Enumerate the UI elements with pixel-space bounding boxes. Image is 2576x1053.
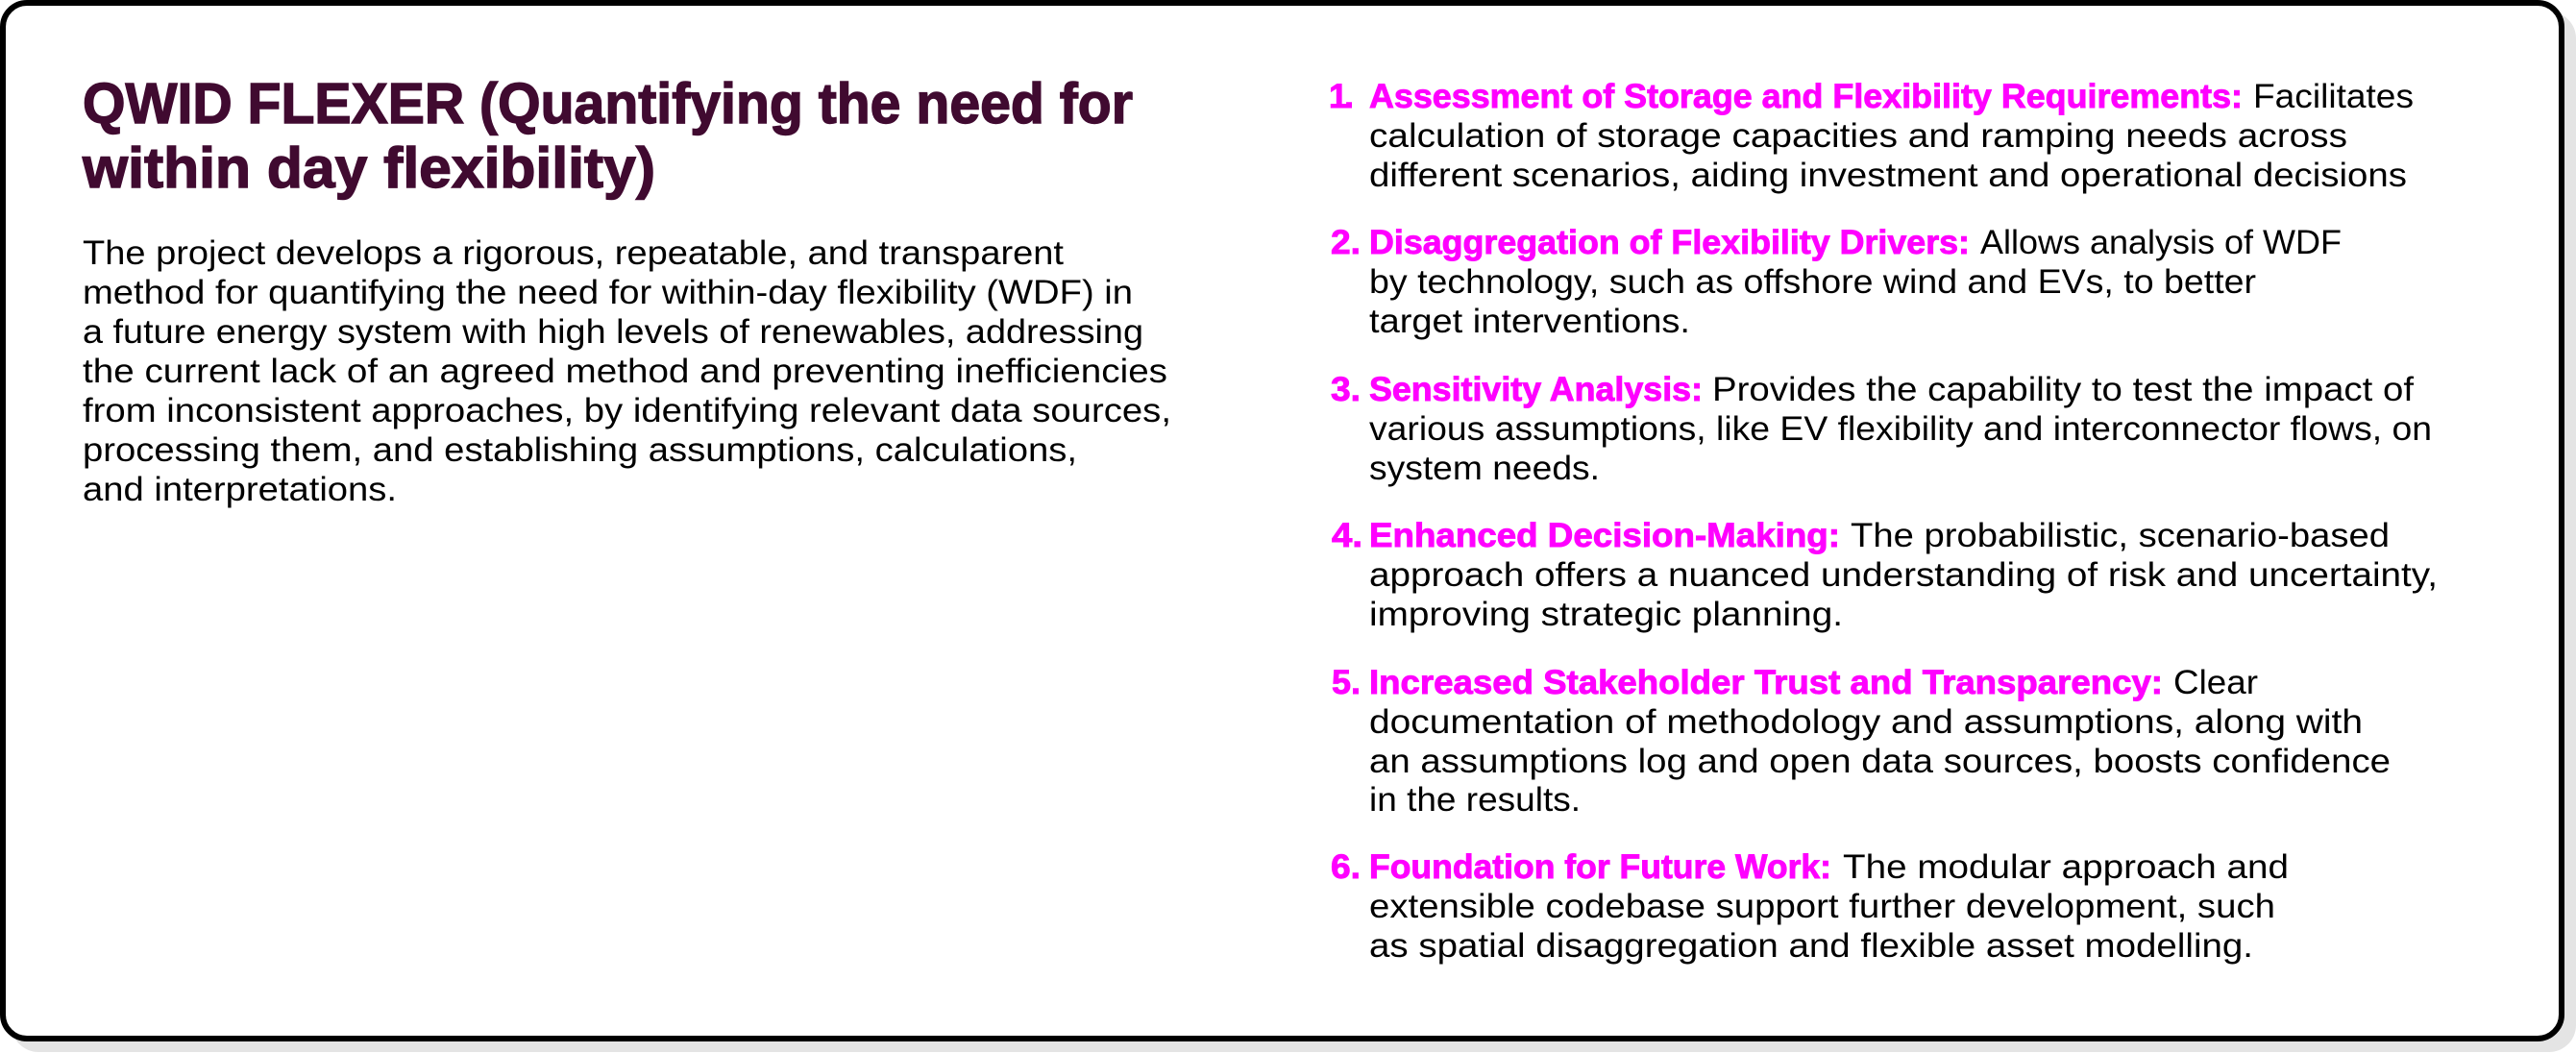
list item 5: stakeholder trust [1332,663,2391,819]
list item 2: flexibility drivers: 2. [1331,223,1361,261]
list item 4: decision-making: Enhanced Decision-Making: [1369,516,1840,554]
list item 6: future work: as spatial disaggregation and flexible asset modelling. [1369,926,2253,965]
list item 3: sensitivity analysis [1331,370,2432,487]
list item 1: storage and flexibility requirements: different scenarios, aiding investment and operational decisions [1369,156,2407,194]
text block: project description: the current lack of an agreed method and preventing inefficiencies [83,352,1167,390]
list item 3: sensitivity analysis: Provides the capability to test the impact of [1712,370,2414,408]
list item 1: storage and flexibility requirements [1329,77,2414,194]
list item 5: stakeholder trust: 5. [1332,663,1361,701]
list item 4: decision-making: improving strategic planning. [1369,595,1843,633]
list item 5: stakeholder trust: in the results. [1369,780,1581,819]
list item 2: flexibility drivers: Disaggregation of Flexibility Drivers: [1369,223,1970,261]
list item 3: sensitivity analysis: various assumptions, like EV flexibility and interconnector flows, on [1369,409,2432,448]
list item 5: stakeholder trust: an assumptions log and open data sources, boosts confidence [1369,742,2391,780]
list item 2: flexibility drivers: by technology, such as offshore wind and EVs, to better [1369,262,2256,301]
list item 6: future work: extensible codebase support further development, such [1369,887,2275,925]
list item 5: stakeholder trust: Clear [2173,663,2258,701]
list item 2: flexibility drivers: Allows analysis of WDF [1980,223,2342,261]
text block: project description: from inconsistent approaches, by identifying relevant data sources, [83,391,1171,429]
list item 4: decision-making [1332,516,2438,633]
title [82,72,1133,200]
list item 5: stakeholder trust: documentation of methodology and assumptions, along with [1369,702,2363,741]
text block: project description: The project develops a rigorous, repeatable, and transparent [83,233,1064,272]
text block: project description: a future energy system with high levels of renewables, addressing [83,312,1143,351]
list item 2: flexibility drivers [1331,223,2342,340]
text block: project description: and interpretations. [83,470,397,508]
list item 6: future work: 6. [1331,847,1361,886]
list item 6: future work: Foundation for Future Work: [1369,847,1831,886]
list item 1: storage and flexibility requirements: Facilitates [2253,77,2414,115]
list item 6: future work: The modular approach and [1843,847,2289,886]
list item 1: storage and flexibility requirements: calculation of storage capacities and ramping needs across [1369,116,2347,155]
list item 5: stakeholder trust: Increased Stakeholder Trust and Transparency: [1369,663,2163,701]
list item 4: decision-making: approach offers a nuanced understanding of risk and uncertainty, [1369,555,2438,594]
text block: project description: processing them, and establishing assumptions, calculations, [83,430,1077,469]
list item 3: sensitivity analysis: 3. [1331,370,1361,408]
list item 2: flexibility drivers: target interventions. [1369,302,1690,340]
title: QWID FLEXER (Quantifying the need for [83,72,1133,135]
text block: project description [83,233,1171,508]
title: within day flexibility) [82,136,655,200]
list item 3: sensitivity analysis: system needs. [1369,449,1600,487]
text block: project description: method for quantifying the need for within-day flexibility (WDF) in [83,273,1133,311]
list item 4: decision-making: 4. [1332,516,1362,554]
list item 1: storage and flexibility requirements: 1. [1329,77,1354,115]
list item 1: storage and flexibility requirements: Assessment of Storage and Flexibility Requirements: [1369,77,2243,115]
list item 6: future work [1331,847,2289,965]
list item 3: sensitivity analysis: Sensitivity Analysis: [1369,370,1703,408]
list item 4: decision-making: The probabilistic, scenario-based [1851,516,2390,554]
